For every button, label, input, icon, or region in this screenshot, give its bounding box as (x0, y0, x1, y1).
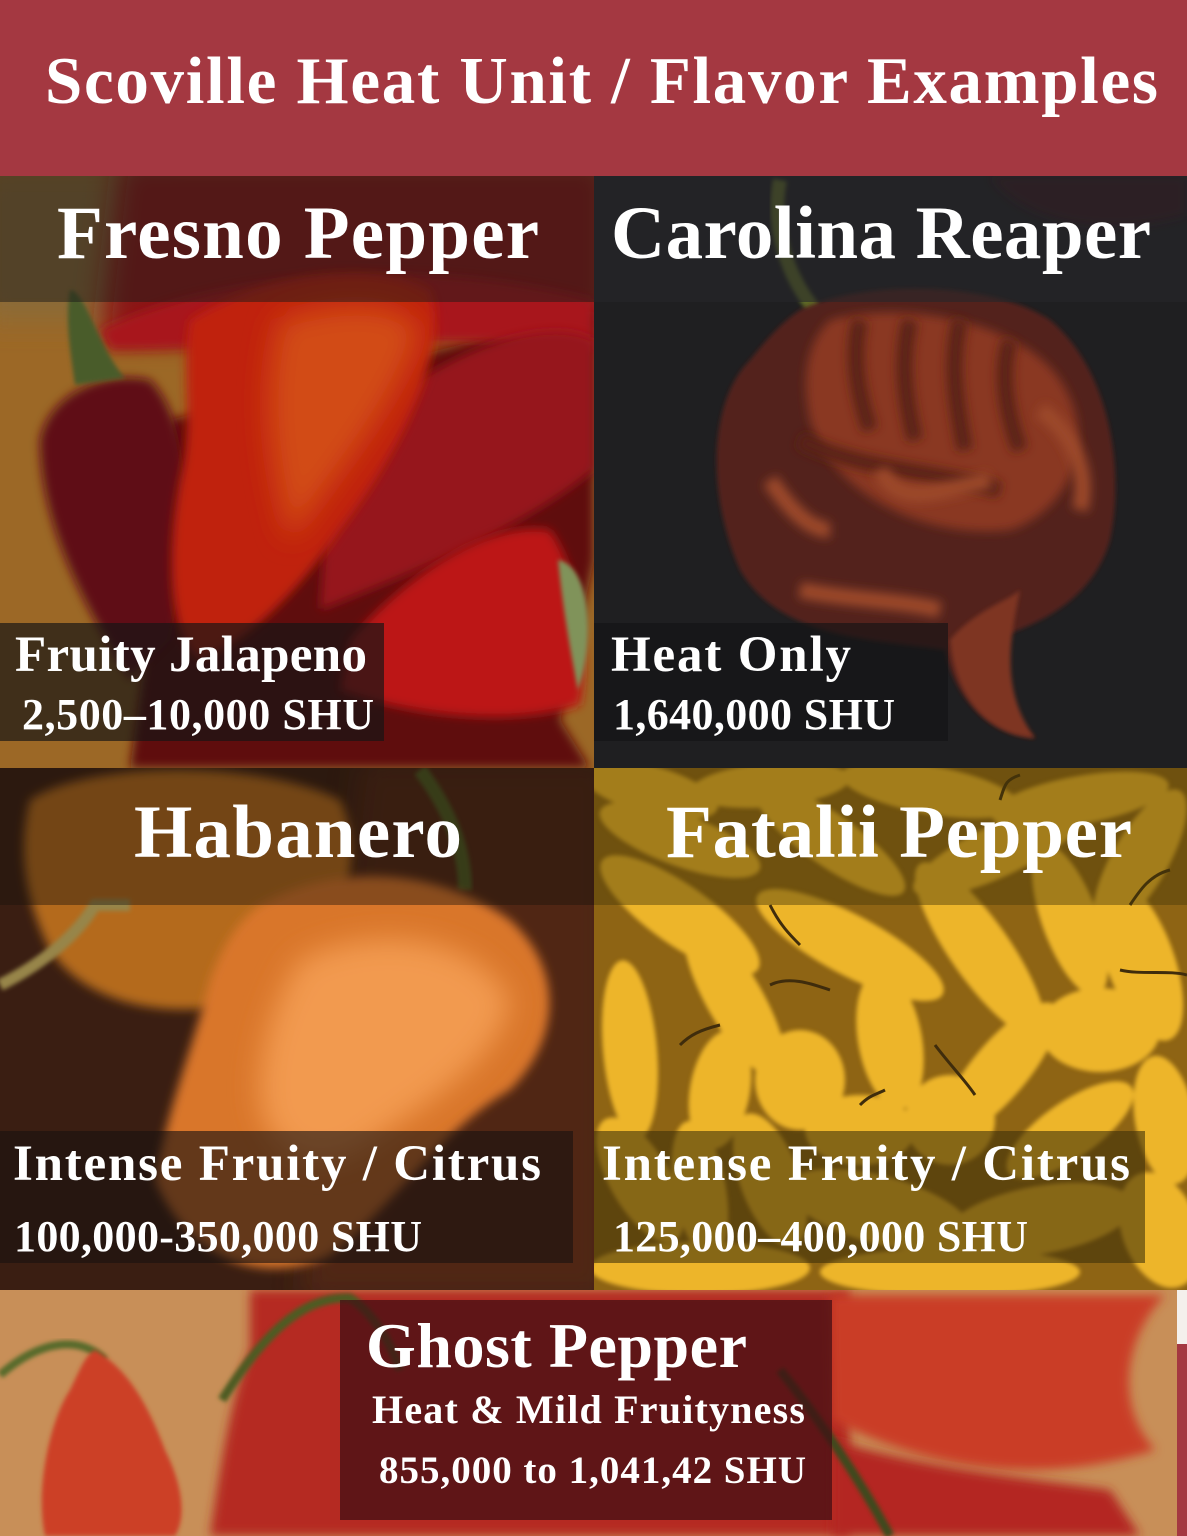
flavor: Fatalii citrus: Intense Fruity / Citrus (602, 1136, 1130, 1192)
panel: Ghost Pepper (0, 1290, 1187, 1536)
panel: Fresno Pepper (0, 160, 610, 768)
photo: red ghost peppers (0, 1290, 1165, 1536)
flavor band: Fatalii Pepper (594, 1131, 1145, 1263)
flavor band: Habanero (0, 1131, 573, 1263)
flavor band: Fresno Pepper (0, 623, 384, 741)
SHU: Ghost Pepper: 855,000 to 1,041,42 SHU (379, 1449, 806, 1492)
flavor: Heat Only: Heat Only (611, 627, 851, 683)
flavor band: Ghost Pepper (340, 1300, 832, 1520)
SHU: Fatalii: 125,000–400,000 SHU (613, 1212, 1028, 1261)
flavor band: Carolina Reaper (794, 623, 948, 674)
heading: Habanero: Habanero (134, 791, 462, 874)
title band: Habanero (0, 768, 594, 905)
title band: Fresno Pepper (0, 176, 594, 302)
photo: Carolina Reaper pepper (717, 176, 1187, 738)
SHU: Fresno: 2,500–10,000 SHU (22, 690, 374, 739)
SHU: Carolina Reaper: 1,640,000 SHU (613, 690, 895, 739)
title: Scoville Heat Unit / Flavor Examples (45, 44, 1158, 118)
panel: Habanero (0, 760, 610, 1300)
flavor: Fruity Jalapeno: Fruity Jalapeno (15, 627, 367, 683)
heading: Fatalii Pepper: Fatalii Pepper (666, 791, 1132, 874)
SHU: Habanero: 100,000-350,000 SHU (14, 1212, 422, 1261)
panel: Carolina Reaper (594, 176, 1187, 768)
photo: red Fresno peppers (40, 273, 594, 768)
photo: orange habanero peppers (0, 770, 549, 1268)
heading: Fresno Pepper: Fresno Pepper (57, 192, 539, 275)
header banner (0, 0, 1187, 176)
flavor: Heat and Mild Fruityness: Heat & Mild Fruityness (372, 1387, 805, 1432)
heading: Ghost Pepper: Ghost Pepper (366, 1310, 747, 1381)
heading: Carolina Reaper: Carolina Reaper (611, 192, 1151, 275)
title band: Carolina Reaper (770, 176, 1187, 302)
title band: Fatalii Pepper (594, 768, 1187, 905)
photo: yellow Fatalii peppers (576, 749, 1187, 1299)
flavor: Habanero citrus: Intense Fruity / Citrus (13, 1136, 541, 1192)
panel: Fatalii Pepper (576, 749, 1187, 1299)
